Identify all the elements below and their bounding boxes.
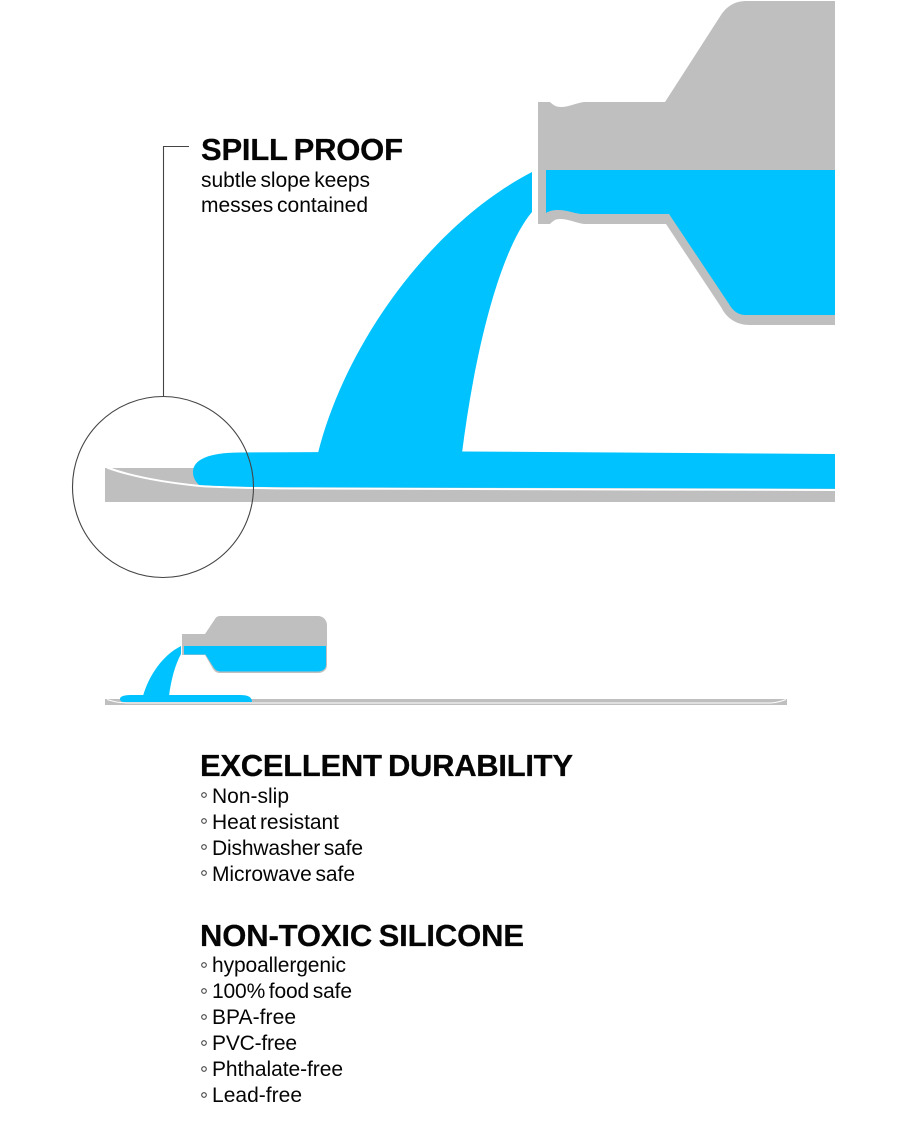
small bottle body	[182, 616, 327, 673]
silicone list: hypoallergenic	[212, 954, 346, 977]
liquid puddle	[193, 452, 835, 489]
heading: spill proof: SPILL PROOF	[201, 132, 403, 167]
heading: excellent durability: EXCELLENT DURABILITY	[200, 748, 573, 783]
silicone list: BPA-free	[212, 1006, 296, 1029]
small puddle	[120, 695, 252, 702]
silicone list: 100% food safe	[212, 980, 352, 1003]
silicone list: Phthalate-free	[212, 1058, 343, 1081]
bottle body	[538, 1, 835, 325]
silicone list: PVC-free	[212, 1032, 297, 1055]
pouring stream	[318, 172, 532, 453]
silicone list	[202, 954, 352, 1107]
durability list: Heat resistant	[212, 811, 339, 834]
small stream	[143, 646, 181, 696]
small bottle liquid	[184, 646, 326, 672]
spill proof description: subtle slope keeps	[201, 169, 370, 192]
section: excellent durability	[200, 748, 573, 886]
section: non-toxic silicone	[200, 918, 524, 1107]
small illustration: full mat with bottle	[105, 616, 787, 705]
spill proof description: messes contained	[201, 194, 368, 217]
bottle liquid	[546, 170, 835, 315]
mat surface line	[107, 468, 835, 490]
small mat	[105, 699, 787, 705]
durability list: Microwave safe	[212, 863, 355, 886]
callout: magnified edge circle and leader line	[72, 146, 254, 578]
durability list: Dishwasher safe	[212, 837, 363, 860]
durability list: Non-slip	[212, 785, 289, 808]
heading: non-toxic silicone: NON-TOXIC SILICONE	[200, 918, 524, 953]
mat base	[105, 468, 835, 502]
heading: spill proof	[201, 132, 403, 217]
silicone list: Lead-free	[212, 1084, 302, 1107]
durability list	[202, 785, 363, 886]
large illustration: bottle pouring onto mat	[105, 1, 835, 502]
spill proof description	[201, 169, 370, 217]
